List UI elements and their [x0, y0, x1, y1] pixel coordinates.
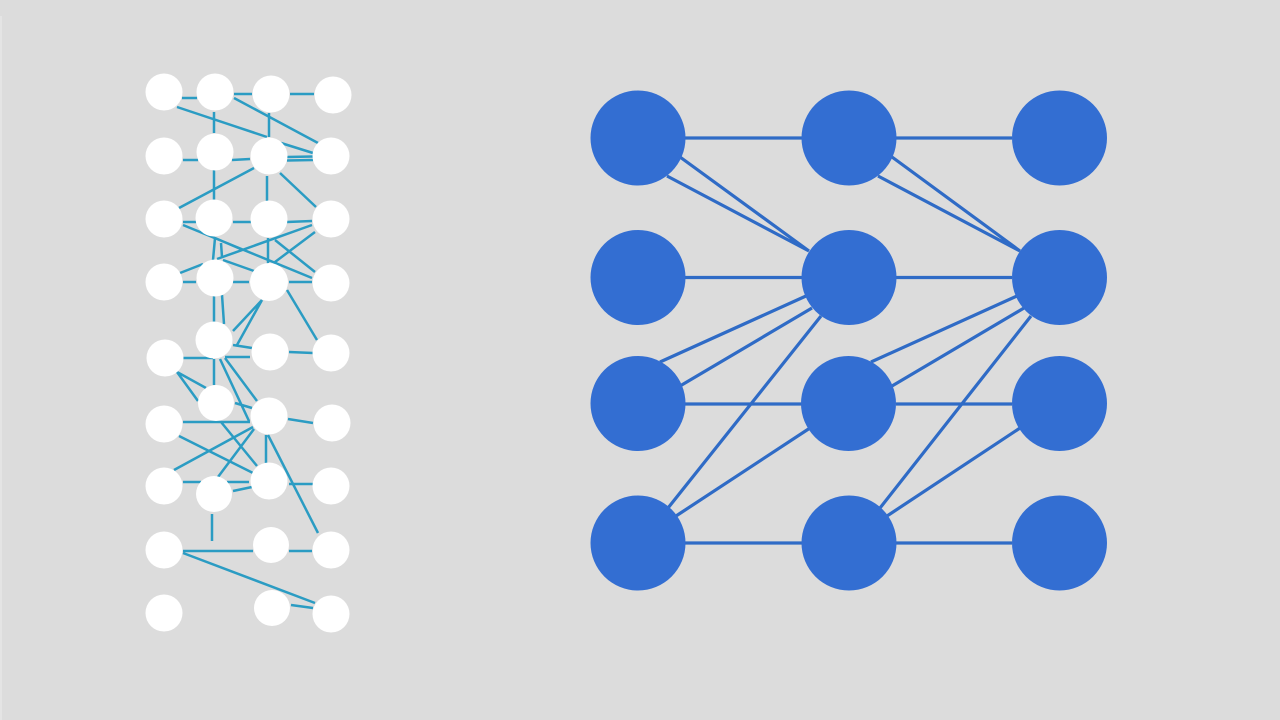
nodes: column 1 [146, 74, 184, 632]
nodes: blue column 2 [801, 90, 896, 590]
nodes: column 3 [250, 76, 290, 626]
nodes: column 2 [196, 74, 234, 512]
connections: blue network links [660, 138, 1031, 543]
nodes: column 4 [312, 76, 352, 632]
panel: structured blue network [590, 90, 1107, 590]
nodes: blue column 3 [1012, 90, 1107, 590]
connections: dense network links [174, 94, 318, 608]
nodes: blue column 1 [590, 90, 686, 590]
panel: dense irregular network [146, 74, 352, 632]
